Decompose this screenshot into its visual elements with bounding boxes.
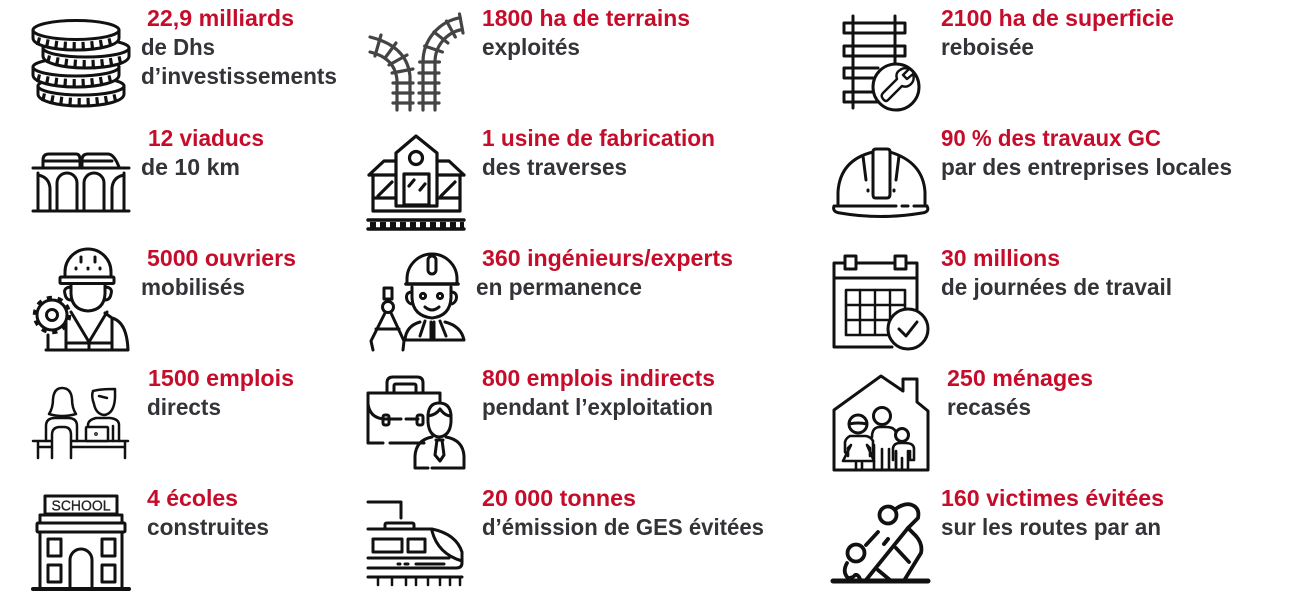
icon: railway with wrench [844,16,919,110]
stat: viaducts: 12 viaducs [148,125,264,151]
panel: workers [35,245,296,350]
icon: railway tracks [370,14,463,110]
stat: workers: 5000 ouvriers [147,245,296,271]
panel: indirect jobs [368,365,715,468]
stat: schools: construites [147,514,269,540]
stat: households: 250 ménages [947,365,1093,391]
icon: school building: SCHOOL [52,498,110,514]
stat: reforestation [941,5,1174,60]
panel: local companies [834,125,1232,216]
stat: direct jobs: 1500 emplois [148,365,294,391]
icon: hard hat [834,149,928,216]
stat: factory: 1 usine de fabrication [482,125,715,151]
panel: reforestation [844,5,1174,110]
stat: working days [941,245,1172,300]
panel: households [834,365,1093,470]
panel: investments [33,5,337,106]
panel: engineers [371,245,733,350]
stat: land: exploités [482,34,580,60]
icon: sleeper factory [368,136,464,229]
stat: households: recasés [947,394,1031,420]
stat: emissions: 20 000 tonnes [482,485,636,511]
stat: local companies [941,125,1232,180]
panel: viaducts [33,125,264,211]
stat: reforestation: reboisée [941,34,1034,60]
stat: engineers: 360 ingénieurs/experts [482,245,733,271]
panel: land [370,5,690,110]
stat: factory: des traverses [482,154,627,180]
panel: emissions [368,485,764,585]
stat: local companies: 90 % des travaux GC [941,125,1161,151]
stat: viaducts: de 10 km [141,154,240,180]
panel: factory [368,125,715,229]
icon: engineer with compass [371,254,464,350]
stat: viaducts [141,125,264,180]
stat: local companies: par des entreprises locales [941,154,1232,180]
stat: direct jobs: directs [147,394,221,420]
icon: overturned car [833,504,928,581]
stat: land [482,5,690,60]
stat: road victims [941,485,1164,540]
stat: workers [141,245,296,300]
icon: calendar with check [834,256,928,349]
panel: road victims [833,485,1164,581]
icon: worker with gear [35,249,128,350]
stat: schools [147,485,269,540]
stat: investments: de Dhs [141,34,215,60]
icon: stack of coins [33,20,129,106]
icon: briefcase and employee [368,377,464,468]
stat: indirect jobs: 800 emplois indirects [482,365,715,391]
stat: reforestation: 2100 ha de superficie [941,5,1174,31]
stat: indirect jobs: pendant l’exploitation [482,394,713,420]
stat: working days: 30 millions [941,245,1060,271]
stat: schools: 4 écoles [147,485,238,511]
stat: working days: de journées de travail [941,274,1172,300]
stat: households [947,365,1093,420]
stat: road victims: 160 victimes évitées [941,485,1164,511]
panel: direct jobs [33,365,294,458]
stat: indirect jobs [482,365,715,420]
panel: working days [834,245,1172,349]
stat: investments [141,5,337,89]
stat: emissions [482,485,764,540]
icon: viaduct with train [33,154,129,211]
panel: schools [33,485,269,589]
stat: land: 1800 ha de terrains [482,5,690,31]
stat: workers: mobilisés [141,274,245,300]
stat: investments: 22,9 milliards [147,5,294,31]
stat: factory [482,125,715,180]
stat: engineers: en permanence [476,274,642,300]
stat: engineers [476,245,733,300]
stat: direct jobs [147,365,294,420]
icon: high-speed train [368,502,462,585]
stat: investments: d’investissements [141,63,337,89]
stat: road victims: sur les routes par an [941,514,1161,540]
icon: school building [33,496,129,589]
stat: emissions: d’émission de GES évitées [482,514,764,540]
icon: family in house [834,376,928,470]
icon: two people at desk [33,388,128,458]
